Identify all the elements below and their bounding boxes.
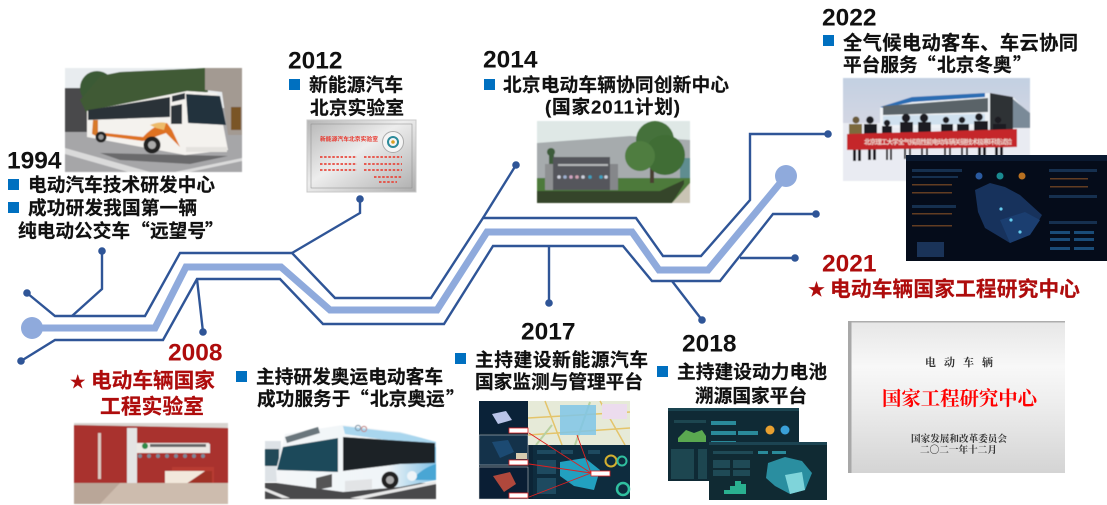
heading: 2021: 2021 (822, 250, 877, 278)
dashboard: vehicle-cloud platform (906, 155, 1107, 261)
text block: 1994 (8, 174, 224, 244)
line: 新能源汽车 (309, 74, 403, 96)
photo: innovation center (537, 121, 690, 203)
bullet (484, 79, 495, 90)
plaque: Beijing lab (307, 120, 416, 192)
callout text: 电动车辆国家工程研究中心 (830, 277, 1080, 301)
start node (21, 317, 43, 339)
star: ★ (70, 374, 86, 391)
bullet (8, 202, 19, 213)
text block: 2022 (823, 32, 1078, 78)
heading: 2014: 2014 (483, 46, 538, 74)
branch end dots (17, 130, 832, 365)
line: 北京实验室 (310, 98, 404, 118)
line: “ (917, 50, 936, 78)
photo: winter bus team (843, 78, 1030, 181)
dashboard: national monitoring platform (479, 401, 630, 499)
text block: 2017 (455, 350, 648, 392)
line: 纯电动公交车 (18, 220, 130, 242)
plaque line: 国家发展和改革委员会 (911, 433, 1007, 445)
heading: 2022: 2022 (822, 4, 877, 32)
line: 全气候电动客车、车云协同 (843, 32, 1078, 54)
heading: 1994: 1994 (7, 148, 62, 174)
bullet (823, 35, 834, 46)
line: 主持建设新能源汽车 (475, 350, 648, 370)
line: 电动汽车技术研发中心 (28, 174, 215, 196)
line: “ (131, 216, 150, 244)
timeline circuit lines (21, 134, 828, 361)
plaque line: 二〇二一年十二月 (920, 444, 997, 456)
plaque title: 国家工程研究中心 (882, 387, 1040, 410)
photo: Olympic bus (265, 425, 436, 499)
line: 工程实验室 (100, 394, 204, 418)
line: 成功研发我国第一辆 (28, 198, 197, 218)
dashboard: battery traceability back panel (668, 408, 799, 481)
line: 电动车辆国家 (91, 368, 215, 392)
lower circuit line (21, 214, 816, 361)
bullet (657, 366, 668, 377)
text block: 2014 (484, 74, 729, 118)
line: ” (446, 384, 465, 412)
dashboard: battery traceability front panel (709, 442, 827, 500)
bullet (8, 179, 19, 190)
callout: national engineering research center (808, 277, 1080, 301)
plaque: national engineering research center (848, 321, 1065, 473)
line: 主持建设动力电池 (677, 362, 827, 382)
heading: 2008: 2008 (168, 340, 223, 366)
callout: national engineering lab (70, 368, 215, 418)
text block: 2018 (657, 362, 827, 406)
line: ” (205, 216, 224, 244)
line: 北京冬奥 (937, 54, 1012, 76)
photo: winter bus team: 北京理工大学全气候高性能电动车辆关键技术极寒环境试验 (864, 137, 1012, 146)
line: 远望号 (150, 220, 206, 242)
line: (国家2011计划) (545, 96, 680, 118)
line: 北京奥运 (370, 388, 445, 410)
main thick timeline (32, 176, 786, 328)
heading: 2017: 2017 (521, 318, 576, 346)
line: 成功服务于 (257, 388, 350, 410)
bullet (455, 353, 466, 364)
heading: 2012: 2012 (288, 48, 343, 74)
photo: 1994 electric bus (65, 68, 242, 172)
text block: Olympic bus (236, 366, 465, 412)
plaque: Beijing lab: 新能源汽车北京实验室 (320, 135, 378, 143)
photo: lab lobby (74, 423, 228, 504)
branch lines (72, 165, 795, 332)
heading: 2018: 2018 (682, 330, 737, 358)
plaque line: 电动车辆 (925, 355, 993, 369)
end node (775, 165, 797, 187)
line: 国家监测与管理平台 (475, 372, 643, 392)
bullet (289, 79, 300, 90)
line: 平台服务 (843, 54, 918, 76)
line: “ (350, 384, 369, 412)
bullet (236, 371, 247, 382)
line: ” (1013, 50, 1032, 78)
star: ★ (808, 280, 825, 300)
line: 溯源国家平台 (695, 386, 807, 406)
line: 北京电动车辆协同创新中心 (503, 74, 729, 96)
line: 主持研发奥运电动客车 (256, 366, 443, 388)
upper circuit line (27, 134, 828, 316)
text block: 2012 (289, 74, 404, 118)
